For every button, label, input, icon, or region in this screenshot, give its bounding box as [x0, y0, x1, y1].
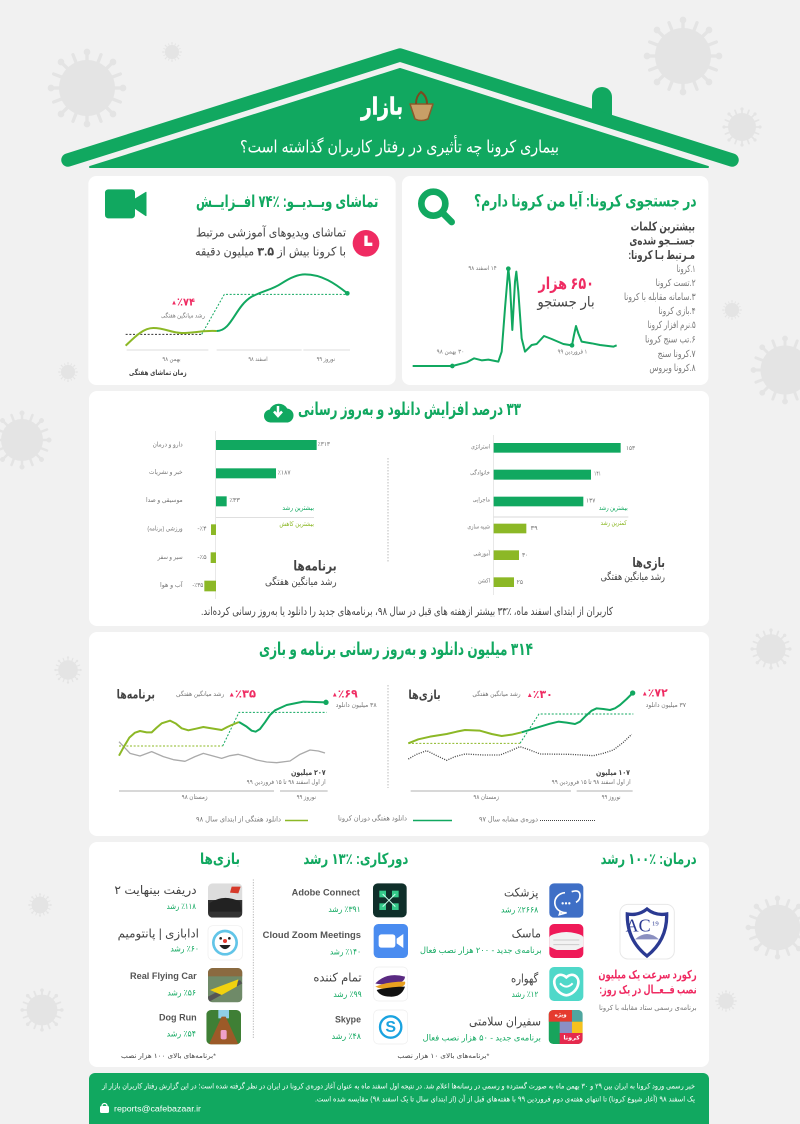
line chart: games downloads: از اول اسفند ۹۸ تا ۱۵ فروردین ۹۹: [552, 779, 631, 786]
app text: mask: [420, 926, 542, 955]
line chart: search volume: ۳۰ بهمن ۹۸: [437, 350, 464, 356]
chart labels: اسفند ۹۸: [248, 356, 268, 363]
icon: AC19 app: AC: [626, 915, 651, 935]
line chart: games downloads: [408, 687, 687, 801]
games chart title: [601, 555, 665, 583]
line chart: apps downloads: از اول اسفند ۹۸ تا ۱۵ فروردین ۹۹: [247, 779, 326, 786]
callout: 650 thousand searches: بار جستجو: [536, 294, 595, 311]
app text: mask: برنامه‌ی جدید - ۲۰۰ هزار نصب فعال: [420, 945, 542, 955]
bar chart: games: ماجرایی: [473, 496, 490, 503]
apps chart title: [265, 558, 337, 588]
app text: dog run: ٪۵۴ رشد: [167, 1028, 196, 1038]
list: top keywords: ۴.بازی کرونا: [658, 306, 696, 317]
line chart: games downloads: ٪۷۲▲: [642, 687, 668, 699]
icon: dog run: [206, 1010, 241, 1044]
icon: video camera: [105, 189, 146, 218]
app text: gahvareh: ٪۱۲ رشد: [512, 989, 539, 999]
remote work and games columns: [114, 851, 408, 1060]
chart labels: زمان تماشای هفتگی: [129, 368, 187, 377]
icon: mask: [549, 924, 583, 958]
callout: record: رکورد سرعت یک میلیون: [598, 968, 697, 982]
chimney: [592, 87, 612, 125]
line chart: search volume: ۱ فروردین ۹۹: [558, 350, 587, 356]
games chart title: بازی‌ها: [632, 555, 665, 570]
bar chart: games: ۳۰: [522, 552, 528, 559]
app text: drift infinity: ٪۱۱۸ رشد: [167, 901, 196, 911]
text block: top keywords heading: بیشترین کلمات: [631, 220, 695, 234]
bar chart: apps: ورزشی (برنامه): [147, 525, 183, 532]
line chart: apps downloads: ٪۶۹▲: [332, 688, 358, 700]
app text: pezeshket: پزشکت: [504, 886, 538, 901]
panel: corona search: [402, 176, 708, 385]
bar chart: apps: خبر و نشریات: [149, 469, 183, 476]
legend: دانلود هفتگی از ابتدای سال ۹۸: [196, 814, 281, 824]
app text: mask: ماسک: [512, 926, 541, 940]
app text: pezeshket: ٪۲۶۶۸ رشد: [501, 904, 539, 914]
app text: adabazi: [118, 926, 199, 953]
bar chart: games: استراتژی: [471, 443, 490, 450]
bar chart: games: کمترین رشد: [601, 519, 627, 527]
chart labels: رشد میانگین هفتگی: [161, 311, 205, 319]
icon: zoom: [374, 924, 408, 958]
heading: games: بازی‌ها: [200, 851, 240, 868]
bar chart: games: [467, 435, 665, 595]
footnote: 100k installs: *برنامه‌های بالای ۱۰۰ هزار نصب: [121, 1053, 216, 1060]
line chart: apps downloads: ۳۸ میلیون دانلود: [336, 702, 377, 709]
line chart: games downloads: رشد میانگین هفتگی: [472, 690, 521, 698]
bar chart: apps: ٪۳۳: [229, 497, 241, 504]
bar chart: games: آموزشی: [473, 549, 490, 558]
footnote: 10k installs: *برنامه‌های بالای ۱۰ هزار نصب: [397, 1053, 490, 1060]
heading: treatment: درمان: ٪۱۰۰ رشد: [601, 851, 697, 868]
app text: adabazi: ادابازی | پانتومیم: [118, 926, 199, 941]
icon: safiran salamati: [549, 1010, 583, 1044]
heading: 33 percent: ۳۳ درصد افزایش دانلود و به‌روز رسانی: [298, 399, 521, 420]
roof outline: [68, 55, 732, 160]
icon: AC19 app: 19: [652, 920, 659, 927]
app text: zoom: [263, 930, 361, 957]
bar chart: games: اکشن: [478, 578, 490, 585]
panel: apps list: [89, 842, 709, 1067]
line chart: apps downloads: زمستان ۹۸: [182, 794, 208, 801]
app text: skype: [332, 1014, 361, 1041]
text block: top keywords heading: جستــجو شده‌ی: [629, 234, 695, 249]
icon: clock: [353, 230, 379, 257]
heading: video: تماشای ویــدیــو: ٪۷۴ افــزایــش: [196, 192, 378, 212]
text block: video description: با کرونا بیش از ۳.۵ میلیون دقیقه: [195, 245, 346, 260]
list: top keywords: ۶.تب سنج کرونا: [645, 334, 696, 345]
list: top keywords: ۵.نرم افزار کرونا: [648, 320, 696, 331]
app text: adobe connect: ٪۳۹۱ رشد: [328, 904, 361, 914]
bar chart: apps: دارو و درمان: [153, 441, 183, 448]
app text: pezeshket: [501, 886, 539, 914]
icon: tamam konandeh: [374, 967, 408, 1001]
app text: adabazi: ٪۶۰ رشد: [170, 943, 199, 953]
icon: adobe connect: [373, 883, 407, 917]
list: top keywords: [624, 264, 696, 374]
heading: 314 million: ۳۱۴ میلیون دانلود و به‌روز رسانی برنامه و بازی: [259, 639, 533, 660]
line chart: games downloads: بازی‌ها: [408, 688, 441, 702]
footer text: خبر رسمی ورود کرونا به ایران بین ۲۹ و ۳۰ بهمن ماه به صورت گسترده و رسمی در رسانه‌ها اعلام شد. در نتیجه اول اسفند ماه به عنوان آغاز دوره‌ی کرونا در ایران در نظر گرفته شده است؛ در این گزارش رفتار کاربران بازار از: [101, 1080, 695, 1090]
callout: 650 thousand searches: [536, 274, 595, 311]
line chart: search volume: ۱۴ اسفند ۹۸: [468, 265, 497, 272]
chart labels: ٪۷۴▲: [171, 297, 195, 309]
bar chart: games: شبیه سازی: [467, 523, 490, 530]
line chart: apps downloads: [117, 687, 377, 801]
app text: tamam konandeh: ٪۹۹ رشد: [333, 989, 362, 999]
icon: safiran salamati: ویژه: [555, 1012, 567, 1018]
app text: safiran salamati: [423, 1015, 541, 1042]
panel: video watching: [88, 176, 396, 385]
app text: real flying car: ٪۵۶ رشد: [167, 988, 196, 998]
heading: search: در جستجوی کرونا: آیا من کرونا دارم؟: [474, 189, 697, 211]
app text: real flying car: [130, 971, 197, 998]
app text: adobe connect: [292, 888, 361, 914]
icon: skype: [374, 1010, 408, 1044]
games chart title: رشد میانگین هفتگی: [601, 571, 665, 583]
bar chart: apps: سیر و سفر: [157, 554, 183, 561]
app text: dog run: Dog Run: [159, 1012, 197, 1022]
line chart: apps downloads: ۲۰۷ میلیون: [291, 768, 326, 777]
chart labels: نوروز ۹۹: [317, 357, 335, 363]
app text: zoom: ٪۱۴۰ رشد: [330, 947, 361, 957]
legend: [196, 814, 595, 824]
bar chart: apps: ٪۴-: [197, 525, 207, 532]
callout: record: [598, 968, 697, 1012]
icon: adabazi pantomime: [208, 926, 242, 960]
app text: zoom: Cloud Zoom Meetings: [263, 930, 361, 940]
text block: top keywords heading: مـرتبط بـا کرونا:: [628, 248, 695, 263]
house roof header: [68, 55, 732, 167]
app text: skype: ٪۴۸ رشد: [332, 1031, 361, 1041]
panel: 314 million downloads: [89, 632, 709, 836]
app text: real flying car: Real Flying Car: [130, 971, 197, 981]
chart labels: [129, 297, 335, 377]
bar chart: apps: [146, 431, 337, 599]
bar chart: games: بیشترین رشد: [599, 505, 628, 512]
app text: drift infinity: [114, 883, 197, 911]
title: بیماری کرونا چه تأثیری در رفتار کاربران گذاشته است؟: [240, 134, 559, 158]
bar chart: games: خانوادگی: [470, 468, 490, 476]
email address: reports@cafebazaar.ir: [114, 1104, 201, 1114]
logo text: بازار: [360, 94, 403, 120]
app text: safiran salamati: سفیران سلامتی: [469, 1015, 541, 1030]
icon: gahvareh: [549, 967, 583, 1001]
line chart: weekly watch time: [126, 274, 350, 350]
bar chart: apps: ٪۳۱۳: [318, 441, 331, 448]
roof inner triangle: [90, 69, 708, 167]
line chart: games downloads: زمستان ۹۸: [473, 794, 499, 801]
bar chart: apps: ٪۵-: [197, 554, 207, 561]
text block: video description: تماشای ویدیوهای آموزشی مرتبط: [196, 224, 346, 240]
caption: downloads: کاربران از ابتدای اسفند ماه، ٪۳۳ بیشتر ازهفته های قبل در سال ۹۸، برنامه‌های جدید را دانلود یا به‌روز رسانی کرده‌اند.: [201, 606, 614, 618]
text block: video description: [195, 224, 346, 260]
line chart: search volume: [413, 265, 617, 368]
list: top keywords: ۱.کرونا: [677, 264, 696, 275]
line chart: apps downloads: ٪۳۵▲: [228, 688, 256, 700]
icon: mail: [100, 1104, 109, 1113]
icon: download cloud: [264, 404, 293, 422]
app text: drift infinity: دریفت بینهایت ۲: [114, 883, 197, 898]
line chart: games downloads: ٪۳۰▲: [527, 689, 553, 701]
app text: safiran salamati: برنامه‌ی جدید - ۵۰ هزار نصب فعال: [423, 1032, 541, 1042]
callout: record: برنامه‌ی رسمی ستاد مقابله با کرونا: [599, 1004, 697, 1012]
footer text: [101, 1080, 695, 1104]
bar chart: games: ۲۵: [517, 579, 524, 586]
app text: adobe connect: Adobe Connect: [292, 888, 360, 898]
list: top keywords: ۸.کرونا ویروس: [649, 363, 696, 374]
line chart: games downloads: ۳۷ میلیون دانلود: [646, 702, 687, 709]
panel: downloads and updates: [89, 391, 709, 626]
icon: skype: S: [385, 1019, 396, 1036]
legend: دانلود هفتگی دوران کرونا: [338, 814, 407, 822]
bar chart: apps: بیشترین کاهش: [279, 520, 314, 528]
bar chart: games: ۳۹: [531, 525, 538, 532]
app text: tamam konandeh: [313, 970, 362, 999]
bar chart: apps: بیشترین رشد: [282, 505, 314, 512]
bar chart: apps: موسیقی و صدا: [146, 497, 183, 504]
line chart: apps downloads: رشد میانگین هفتگی: [176, 690, 224, 698]
chart labels: بهمن ۹۸: [162, 357, 181, 363]
callout: 650 thousand searches: ۶۵۰ هزار: [538, 274, 594, 294]
footer text: یک اسفند ۹۸ (آغاز شیوع کرونا) تا انتهای هفته‌ی دوم فروردین ۹۹ با هفته‌های قبل از آن (از ابتدای سال تا یک اسفند ۹۸) مقایسه شده است.: [315, 1094, 695, 1104]
bar chart: apps: آب و هوا: [160, 580, 183, 589]
app text: dog run: [159, 1012, 197, 1038]
icon: AC19 app: [620, 904, 674, 959]
icon: pezeshket: [549, 883, 583, 918]
app text: tamam konandeh: تمام کننده: [313, 970, 362, 984]
footer panel: [89, 1073, 709, 1124]
text block: top keywords heading: [628, 220, 695, 263]
line chart: apps downloads: نوروز ۹۹: [297, 794, 316, 801]
bar chart: apps: ٪۱۸۷: [278, 469, 291, 476]
icon: bazaar basket: [410, 92, 433, 120]
list: top keywords: ۳.سامانه مقابله با کرونا: [624, 292, 696, 303]
callout: record: نصب فــعــال در یک روز:: [599, 983, 697, 997]
icon: real flying car: [208, 968, 242, 1002]
app text: gahvareh: گهواره: [511, 971, 539, 986]
icon: magnifier: [421, 192, 452, 222]
app text: gahvareh: [511, 971, 539, 999]
line chart: apps downloads: برنامه‌ها: [117, 687, 155, 701]
line chart: games downloads: ۱۰۷ میلیون: [596, 768, 630, 777]
icon: drift infinity game: [208, 883, 242, 918]
bar chart: games: ۱۴۱: [594, 470, 601, 477]
line chart: games downloads: نوروز ۹۹: [602, 794, 621, 801]
icon: safiran salamati: کرونا: [563, 1034, 581, 1041]
bar chart: games: ۱۳۷: [586, 497, 596, 504]
list: top keywords: ۲.تست کرونا: [656, 278, 696, 289]
heading: remote work: دورکاری: ٪۱۳ رشد: [303, 851, 408, 868]
bar chart: apps: ٪۳۵-: [192, 582, 204, 589]
list: top keywords: ۷.کرونا سنج: [658, 349, 696, 360]
treatment column: [397, 851, 697, 1060]
bar chart: games: ۱۵۳: [626, 445, 636, 452]
apps chart title: رشد میانگین هفتگی: [265, 576, 337, 588]
app text: skype: Skype: [335, 1014, 361, 1024]
apps chart title: برنامه‌ها: [293, 558, 337, 575]
legend: دوره‌ی مشابه سال ۹۷: [479, 816, 538, 824]
